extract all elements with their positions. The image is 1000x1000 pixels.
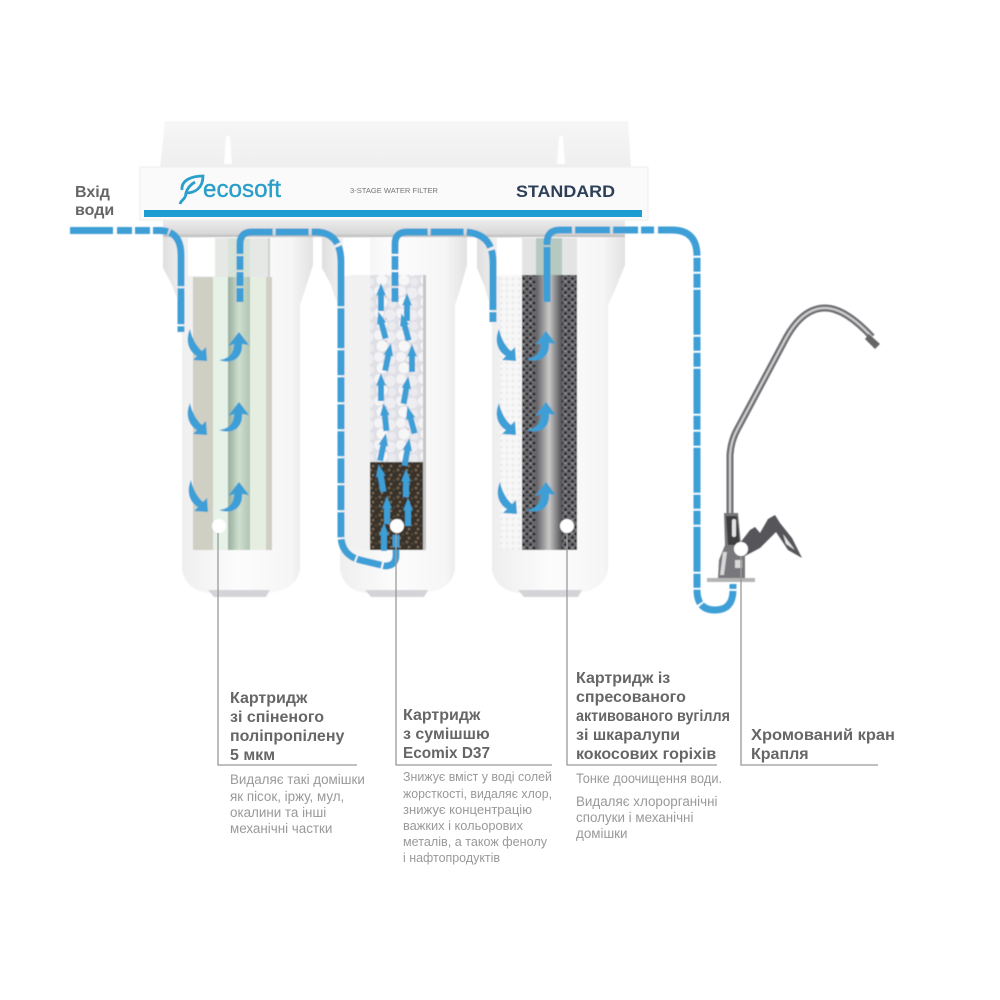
callout: polypropylene cartridge: Картридж — [230, 690, 308, 707]
blue bracket stripe — [144, 210, 642, 217]
callout: Ecomix cartridge: з сумішшю — [403, 726, 490, 743]
callout: Ecomix cartridge: Картридж — [403, 707, 481, 724]
callout: Ecomix cartridge: і нафтопродуктів — [403, 851, 500, 865]
filter housing 1 — [163, 237, 313, 597]
filter housing 3 — [477, 237, 625, 597]
callout: Ecomix cartridge: важких і кольорових — [403, 819, 524, 833]
callout: carbon cartridge: сполуки і механічні — [576, 810, 693, 825]
callout: carbon cartridge: Картридж із — [576, 670, 670, 687]
callout: chrome faucet — [741, 556, 895, 765]
callout: polypropylene cartridge: 5 мкм — [230, 747, 275, 764]
bracket branding — [144, 176, 642, 217]
filter housing 2 — [322, 237, 467, 597]
callout: polypropylene cartridge: поліпропілену — [230, 728, 344, 745]
product line text: 3-STAGE WATER FILTER — [350, 188, 438, 195]
callout: polypropylene cartridge: як пісок, іржу, мул, — [230, 789, 344, 804]
callout: carbon cartridge: кокосових горіхів — [576, 746, 716, 763]
callout: Ecomix cartridge — [396, 533, 552, 865]
housing neck cut-aways — [188, 238, 577, 538]
mounting bracket — [140, 121, 648, 237]
callout: polypropylene cartridge — [218, 533, 365, 836]
callout: carbon cartridge: активованого вугілля — [576, 708, 730, 725]
chrome faucet — [707, 308, 880, 582]
water inlet label — [75, 184, 114, 219]
callout: carbon cartridge: зі шкаралупи — [576, 727, 680, 744]
callout: carbon cartridge: Видаляє хлорорганічні — [576, 794, 718, 809]
water filter illustration — [70, 121, 880, 610]
callout: polypropylene cartridge: зі спіненого — [230, 709, 324, 726]
standard label: STANDARD — [516, 182, 615, 201]
callout: carbon cartridge: Тонке доочищення води. — [576, 771, 722, 786]
callout: Ecomix cartridge: Знижує вміст у воді солей — [403, 770, 552, 784]
callout: Ecomix cartridge: металів, а також фенолу — [403, 835, 548, 849]
callout: polypropylene cartridge: механічні частки — [230, 821, 332, 836]
cartridge 3: activated carbon — [500, 275, 577, 550]
callout: polypropylene cartridge: Видаляє такі домішки — [230, 772, 365, 787]
callout: carbon cartridge: спресованого — [576, 689, 686, 706]
callout: Ecomix cartridge: Ecomix D37 — [403, 745, 490, 762]
ecosoft logo: ecosoft — [203, 176, 281, 203]
callout: Ecomix cartridge: знижує концентрацію — [403, 803, 532, 817]
callout: chrome faucet: Крапля — [751, 746, 809, 763]
water flow path — [70, 230, 733, 610]
callout: carbon cartridge — [567, 533, 730, 841]
cartridge 1: foamed polypropylene — [193, 277, 272, 550]
cartridge 2: Ecomix D37 — [350, 275, 426, 550]
water inlet label: води — [75, 202, 114, 219]
callout: polypropylene cartridge: окалини та інші — [230, 805, 326, 820]
marker dots — [212, 519, 748, 556]
curved flow arrows — [188, 283, 556, 551]
water inlet label: Вхід — [75, 184, 110, 201]
callout: carbon cartridge: домішки — [576, 826, 628, 841]
callout: Ecomix cartridge: жорсткості, видаляє хлор, — [403, 787, 552, 801]
callout: chrome faucet: Хромований кран — [751, 727, 895, 744]
